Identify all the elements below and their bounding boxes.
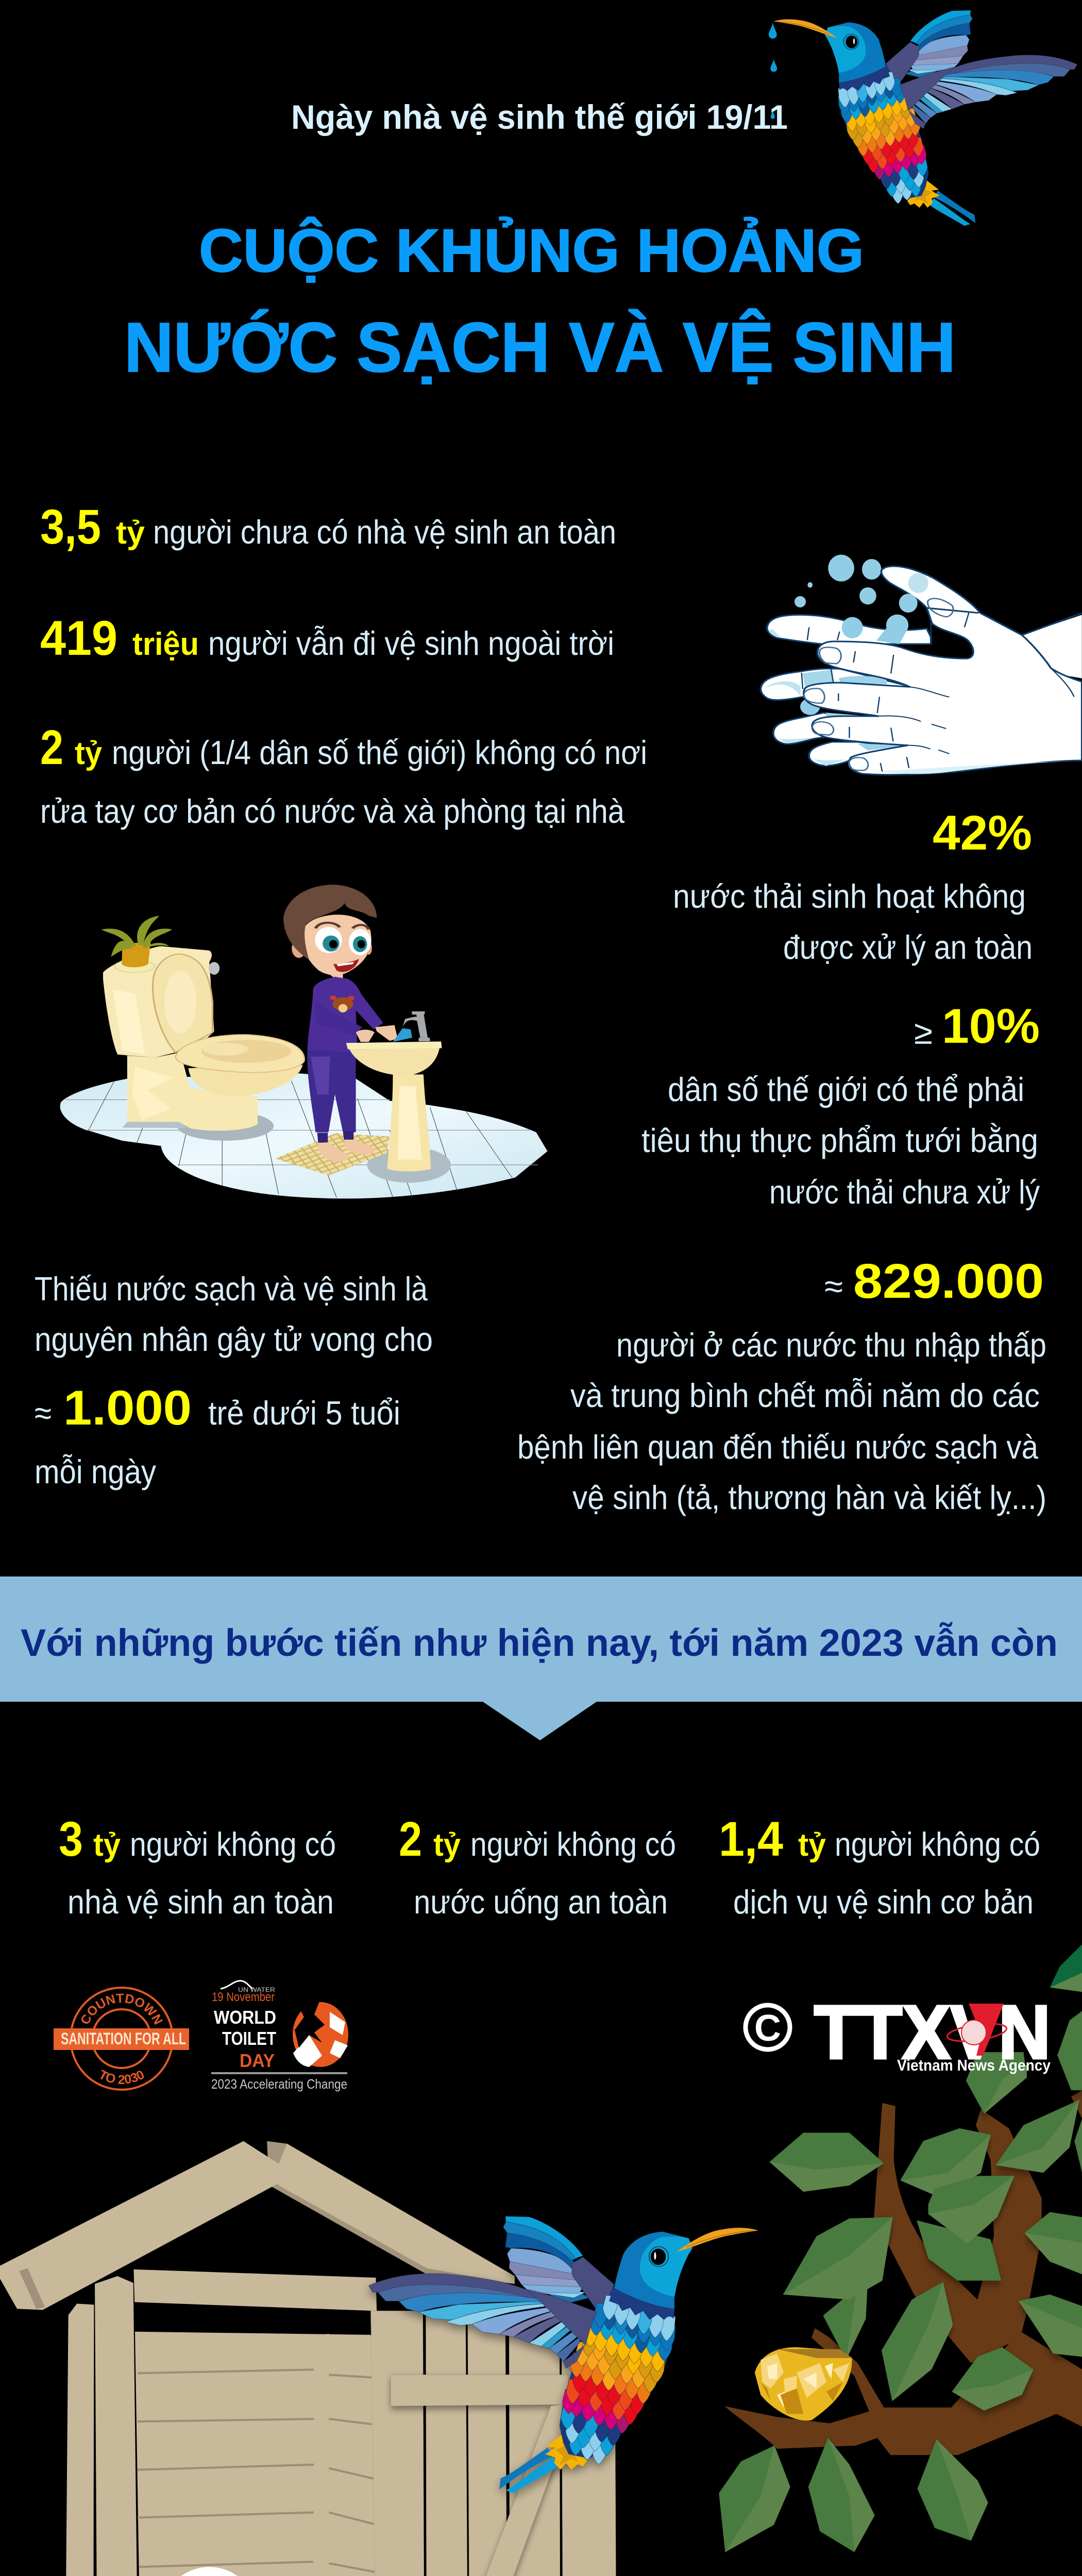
logo: world toilet day: TOILET <box>222 2028 276 2049</box>
stat: about 829,000: và trung bình chết mỗi năm do các <box>570 1377 1040 1414</box>
tree with leaves <box>719 1944 1082 2552</box>
back wall and side wall <box>135 2332 564 2576</box>
stat: 2 billion: 2 <box>40 720 63 775</box>
toilet <box>103 946 305 1131</box>
logo: TTXVN: Vietnam News Agency <box>897 2056 1051 2074</box>
stat: about 829,000: bệnh liên quan đến thiếu nước sạch và <box>517 1428 1039 1466</box>
front planks and posts <box>0 2141 515 2576</box>
stat: 1.4 billion no basic sanitation <box>719 1812 1040 1921</box>
title: CUỘC KHỦNG HOẢNG <box>199 216 864 285</box>
stat: 42 percent: nước thải sinh hoạt không <box>673 877 1026 915</box>
stat: 2 billion no safe drinking water: người không có <box>470 1825 676 1863</box>
logo: world toilet day: 2023 Accelerating Change <box>211 2076 347 2092</box>
title <box>124 216 956 386</box>
top hummingbird <box>774 10 1077 226</box>
stat: 1.4 billion no basic sanitation: dịch vụ vệ sinh cơ bản <box>733 1883 1034 1921</box>
stat: about 829,000: 829.000 <box>853 1254 1044 1309</box>
stat: 3 billion no safe toilet <box>59 1812 336 1921</box>
logo: TTXVN: TTXVN <box>814 1990 1051 2075</box>
stat: 1.4 billion no basic sanitation: người không có <box>835 1825 1040 1863</box>
stat: about 1,000 children: mỗi ngày <box>35 1453 156 1490</box>
bird nest <box>755 2347 852 2420</box>
logo: sanitation for all: COUNTDOWN <box>81 1994 163 2025</box>
stat: 2 billion no safe drinking water: nước uống an toàn <box>414 1883 668 1921</box>
stat: 419 million <box>40 611 614 666</box>
stat: at least 10 percent: 10% <box>942 999 1040 1054</box>
door <box>371 2311 617 2576</box>
potted plant <box>102 916 172 973</box>
stat: 3 billion no safe toilet: người không có <box>130 1825 336 1863</box>
floor <box>60 1074 548 1198</box>
logo: world toilet day: UN WATER <box>238 1986 275 1993</box>
stat: 42 percent: được xử lý an toàn <box>783 928 1033 966</box>
logo: sanitation for all: TO 2030 <box>100 2070 144 2084</box>
stat: 419 million: 419 <box>40 611 117 666</box>
banner: Với những bước tiến như hiện nay, tới năm 2023 vẫn còn <box>21 1621 1058 1664</box>
subtitle: Ngày nhà vệ sinh thế giới 19/11 <box>291 98 788 136</box>
logo: sanitation for all <box>54 1987 189 2091</box>
stat: at least 10 percent: ≥ <box>914 1013 933 1051</box>
stat: 2 billion no safe drinking water: 2 <box>399 1812 422 1867</box>
stat: 419 million: triệu <box>132 626 199 662</box>
logo: world toilet day <box>211 1981 348 2092</box>
illustration: boy washing hands beside toilet <box>60 885 548 1198</box>
stat: about 829,000 <box>517 1254 1046 1516</box>
stat: 1.4 billion no basic sanitation: tỷ <box>798 1827 826 1863</box>
logo: world toilet day: 19 November <box>212 1990 275 2004</box>
stat: about 1,000 children: ≈ <box>35 1394 52 1432</box>
stat: 2 billion <box>40 720 647 830</box>
stat: about 1,000 children <box>35 1270 433 1490</box>
stat: about 1,000 children: nguyên nhân gây tử vong cho <box>35 1320 433 1358</box>
stat: 419 million: người vẫn đi vệ sinh ngoài trời <box>208 624 614 662</box>
stat: at least 10 percent: tiêu thụ thực phẩm tưới bằng <box>641 1122 1038 1159</box>
branches <box>724 2090 1082 2455</box>
stat: 3.5 billion: người chưa có nhà vệ sinh an toàn <box>153 513 616 551</box>
stat: 3.5 billion <box>40 500 616 554</box>
stat: about 1,000 children: Thiếu nước sạch và vệ sinh là <box>35 1270 428 1308</box>
stat: 2 billion no safe drinking water <box>399 1812 676 1921</box>
stat: at least 10 percent <box>641 999 1040 1211</box>
stat: 3 billion no safe toilet: nhà vệ sinh an toàn <box>67 1883 334 1921</box>
icon: washing hands <box>760 555 1082 775</box>
copyright symbol: C <box>754 2008 781 2049</box>
stat: at least 10 percent: dân số thế giới có thể phải <box>668 1071 1024 1108</box>
logo: world toilet day: WORLD <box>214 2007 276 2028</box>
stat: 42 percent: 42% <box>933 806 1032 860</box>
stat: about 1,000 children: trẻ dưới 5 tuổi <box>208 1394 400 1432</box>
wooden outhouse <box>0 2141 617 2576</box>
stat: about 829,000: ≈ <box>824 1267 843 1305</box>
stat: 2 billion no safe drinking water: tỷ <box>433 1827 461 1863</box>
stat: 3.5 billion: tỷ <box>116 515 145 551</box>
toilet seat <box>139 2567 358 2576</box>
banner <box>0 1577 1082 1740</box>
copyright symbol <box>746 2005 790 2049</box>
stat: 2 billion: rửa tay cơ bản có nước và xà phòng tại nhà <box>40 792 625 830</box>
stat: 42 percent <box>673 806 1033 966</box>
bath mat <box>275 1133 390 1175</box>
stat: 1.4 billion no basic sanitation: 1,4 <box>719 1812 783 1867</box>
wash basin <box>346 1042 442 1172</box>
bottom hummingbird <box>368 2216 758 2493</box>
stat: at least 10 percent: nước thải chưa xử lý <box>769 1173 1040 1211</box>
stat: 3.5 billion: 3,5 <box>40 500 101 554</box>
stat: 2 billion: tỷ <box>75 736 102 771</box>
stat: 2 billion: người (1/4 dân số thế giới) không có nơi <box>112 734 647 771</box>
leaves <box>719 1944 1082 2552</box>
stat: 3 billion no safe toilet: tỷ <box>93 1827 121 1863</box>
stat: 3 billion no safe toilet: 3 <box>59 1812 83 1867</box>
stat: about 1,000 children: 1.000 <box>63 1381 192 1435</box>
boy <box>283 885 430 1162</box>
title: NƯỚC SẠCH VÀ VỆ SINH <box>124 308 956 386</box>
logo: sanitation for all: SANITATION FOR ALL <box>61 2029 186 2048</box>
logo: world toilet day: DAY <box>240 2050 275 2071</box>
water drops <box>769 23 777 119</box>
